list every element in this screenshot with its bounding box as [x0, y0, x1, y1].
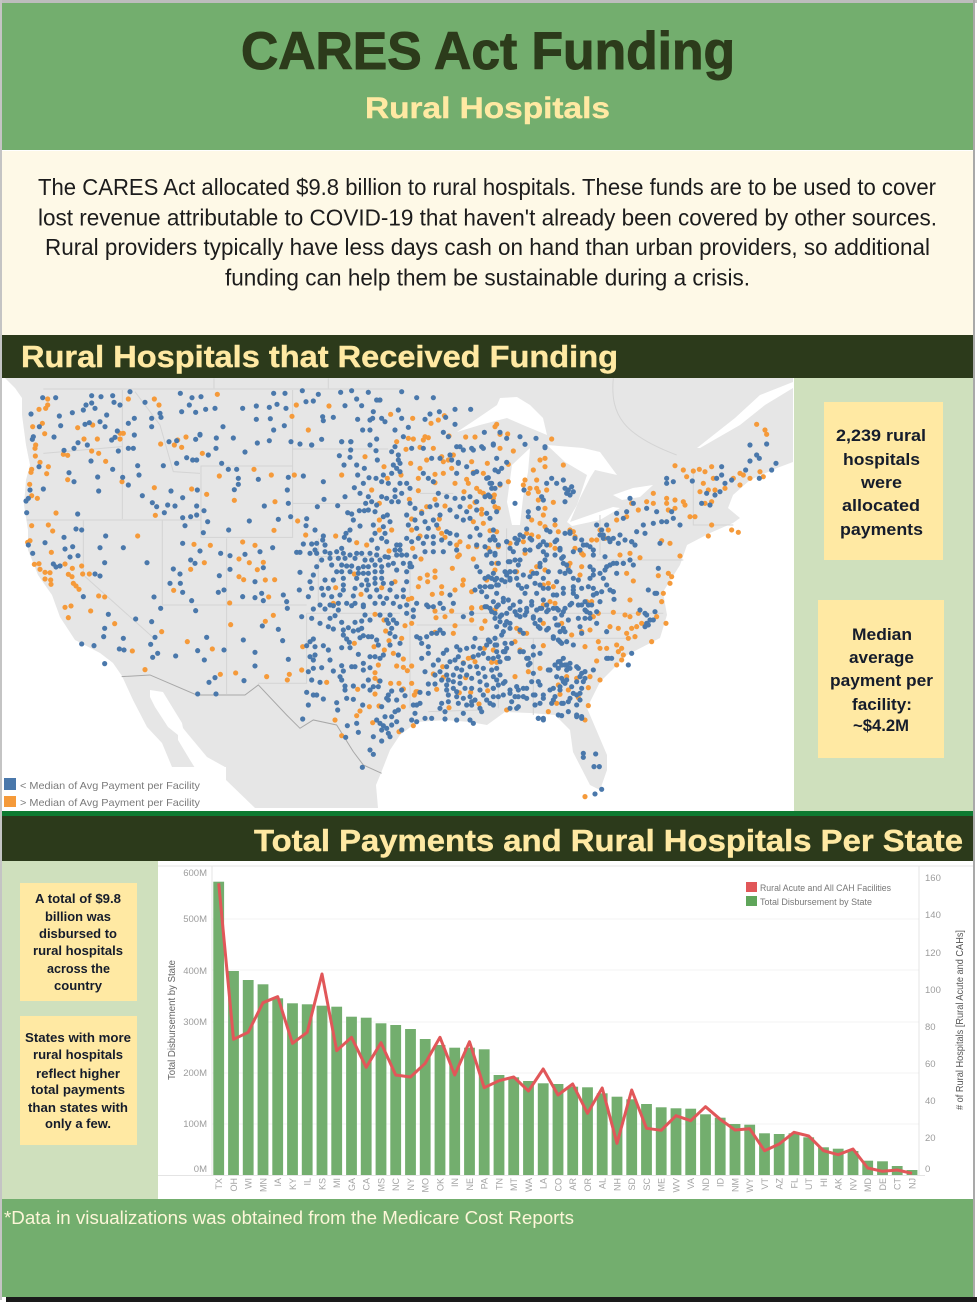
- state labels: MO: [420, 1178, 430, 1192]
- line: rural hospital count: [219, 883, 912, 1173]
- title: CARES Act Funding: [241, 22, 735, 81]
- callout: hospital count: payments: [840, 520, 923, 539]
- map legend: < Median of Avg Payment per Facility: [20, 780, 201, 792]
- state labels: WV: [671, 1178, 681, 1192]
- left axis labels: [183, 868, 207, 1175]
- right axis labels: 20: [925, 1133, 936, 1144]
- left axis labels: 0M: [194, 1164, 207, 1175]
- right axis labels: 40: [925, 1096, 936, 1107]
- left axis title: Total Disbursement by State: [167, 960, 178, 1080]
- right axis labels: 0: [925, 1164, 930, 1175]
- state labels: UT: [804, 1178, 814, 1190]
- state labels: VA: [686, 1178, 696, 1189]
- bars: total disbursement by state: [213, 882, 917, 1175]
- callout: median payment: facility:: [852, 695, 912, 714]
- state labels: WY: [745, 1178, 755, 1192]
- state labels: OK: [435, 1178, 445, 1191]
- state labels: LA: [538, 1178, 548, 1189]
- section heading: state payments: [2, 811, 973, 861]
- map panel: [2, 378, 794, 811]
- state labels: CT: [892, 1178, 902, 1190]
- right axis labels: 80: [925, 1022, 936, 1033]
- callout: hospital count: 2,239 rural: [836, 426, 926, 445]
- callout: hospital count: hospitals: [843, 450, 920, 469]
- callout: median payment: ~$4.2M: [853, 716, 909, 735]
- state labels: NE: [465, 1178, 475, 1191]
- callout: hospital count: [824, 402, 943, 560]
- state labels: DE: [878, 1178, 888, 1191]
- callout: median payment: payment per: [830, 671, 933, 690]
- state labels: SD: [627, 1178, 637, 1191]
- callout: total disbursed: country: [54, 978, 103, 993]
- state labels: WA: [524, 1178, 534, 1192]
- section heading: map: Rural Hospitals that Received Funding: [21, 339, 618, 374]
- left axis labels: 400M: [183, 966, 207, 977]
- left axis labels: 200M: [183, 1068, 207, 1079]
- state labels: IL: [302, 1178, 312, 1186]
- intro text: funding can help them be sustainable during a crisis.: [225, 264, 750, 290]
- callout: median payment: Median: [852, 625, 912, 644]
- subtitle: Rural Hospitals: [365, 92, 610, 125]
- land base map: [5, 378, 793, 808]
- hospitals below median (blue dots): [26, 391, 776, 794]
- intro text: lost revenue attributable to COVID-19 that haven't already been covered by other sources.: [38, 204, 937, 230]
- callout: hospital count: allocated: [842, 496, 920, 515]
- state labels: CA: [362, 1178, 372, 1191]
- section heading: state payments: Total Payments and Rural Hospitals Per State: [254, 823, 963, 858]
- callout: states comparison: [20, 1016, 137, 1145]
- state labels: SC: [642, 1178, 652, 1191]
- state labels: AK: [834, 1178, 844, 1190]
- state labels: [214, 1177, 917, 1192]
- right axis labels: [925, 873, 941, 1175]
- state labels: AZ: [774, 1178, 784, 1190]
- combo chart: payments and hospitals per state: [158, 861, 973, 1199]
- state labels: NC: [391, 1178, 401, 1191]
- state labels: NJ: [907, 1178, 917, 1189]
- callout: states comparison: only a few.: [45, 1116, 111, 1131]
- callout: total disbursed: A total of $9.8: [35, 891, 121, 906]
- state labels: IA: [273, 1178, 283, 1187]
- chart legend: [746, 882, 891, 907]
- left axis labels: 100M: [183, 1119, 207, 1130]
- state labels: MN: [258, 1178, 268, 1192]
- callout: states comparison: than states with: [28, 1100, 128, 1115]
- callout: total disbursed: billion was: [45, 909, 111, 924]
- callout: states comparison: rural hospitals: [33, 1047, 123, 1062]
- data source note: *Data in visualizations was obtained from the Medicare Cost Reports: [4, 1207, 574, 1228]
- map legend: [4, 778, 201, 809]
- state labels: NV: [848, 1178, 858, 1191]
- intro text: Rural providers typically have less days cash on hand than urban providers, so additional: [45, 234, 930, 260]
- state labels: ND: [701, 1178, 711, 1191]
- state labels: VT: [760, 1178, 770, 1190]
- chart legend: Total Disbursement by State: [760, 897, 872, 907]
- left sidebar: chart callouts: [2, 861, 158, 1199]
- state labels: TN: [494, 1178, 504, 1190]
- callout: states comparison: total payments: [31, 1082, 125, 1097]
- callout: states comparison: reflect higher: [36, 1066, 120, 1081]
- state labels: ME: [656, 1178, 666, 1192]
- callout: total disbursed: disbursed to: [39, 926, 117, 941]
- state labels: NM: [730, 1178, 740, 1192]
- callout: states comparison: States with more: [25, 1030, 131, 1045]
- state labels: NH: [612, 1178, 622, 1191]
- callout: hospital count: were: [860, 473, 902, 492]
- hospitals above median (orange dots): [28, 394, 767, 797]
- state labels: AR: [568, 1178, 578, 1191]
- sidebar: map callouts: [794, 378, 973, 811]
- right axis labels: 100: [925, 985, 941, 996]
- section heading: map: [2, 335, 973, 378]
- state labels: OR: [583, 1177, 593, 1192]
- state labels: MI: [332, 1178, 342, 1188]
- right axis labels: 60: [925, 1059, 936, 1070]
- intro text: [38, 174, 937, 290]
- left axis labels: 600M: [183, 868, 207, 879]
- state labels: PA: [480, 1178, 490, 1189]
- intro text: The CARES Act allocated $9.8 billion to rural hospitals. These funds are to be used to cover: [38, 174, 936, 200]
- header panel: [2, 3, 973, 150]
- callout: median payment: average: [849, 648, 914, 667]
- state labels: MT: [509, 1178, 519, 1191]
- right axis title: # of Rural Hospitals [Rural Acute and CAHs]: [955, 930, 966, 1110]
- state labels: GA: [347, 1178, 357, 1191]
- left axis labels: 300M: [183, 1017, 207, 1028]
- state labels: WI: [244, 1178, 254, 1189]
- state labels: AL: [598, 1178, 608, 1189]
- state labels: IN: [450, 1178, 460, 1187]
- intro panel: [2, 151, 973, 335]
- state labels: KS: [317, 1178, 327, 1190]
- state labels: ID: [716, 1177, 726, 1187]
- chart legend: Rural Acute and All CAH Facilities: [760, 883, 891, 893]
- callout: total disbursed: rural hospitals: [33, 943, 123, 958]
- left axis labels: 500M: [183, 914, 207, 925]
- state labels: NY: [406, 1178, 416, 1191]
- state labels: CO: [553, 1178, 563, 1192]
- callout: total disbursed: across the: [47, 961, 110, 976]
- state labels: MD: [863, 1178, 873, 1192]
- callout: total disbursed: [20, 883, 137, 1001]
- state labels: TX: [214, 1178, 224, 1190]
- right axis labels: 160: [925, 873, 941, 884]
- callout: median payment: [818, 600, 944, 758]
- state labels: KY: [288, 1178, 298, 1190]
- right axis labels: 140: [925, 910, 941, 921]
- state labels: HI: [819, 1178, 829, 1187]
- footer panel: [2, 1199, 973, 1297]
- state labels: OH: [229, 1178, 239, 1192]
- state labels: MS: [376, 1178, 386, 1192]
- state labels: FL: [789, 1178, 799, 1189]
- map legend: > Median of Avg Payment per Facility: [20, 797, 201, 809]
- right axis labels: 120: [925, 948, 941, 959]
